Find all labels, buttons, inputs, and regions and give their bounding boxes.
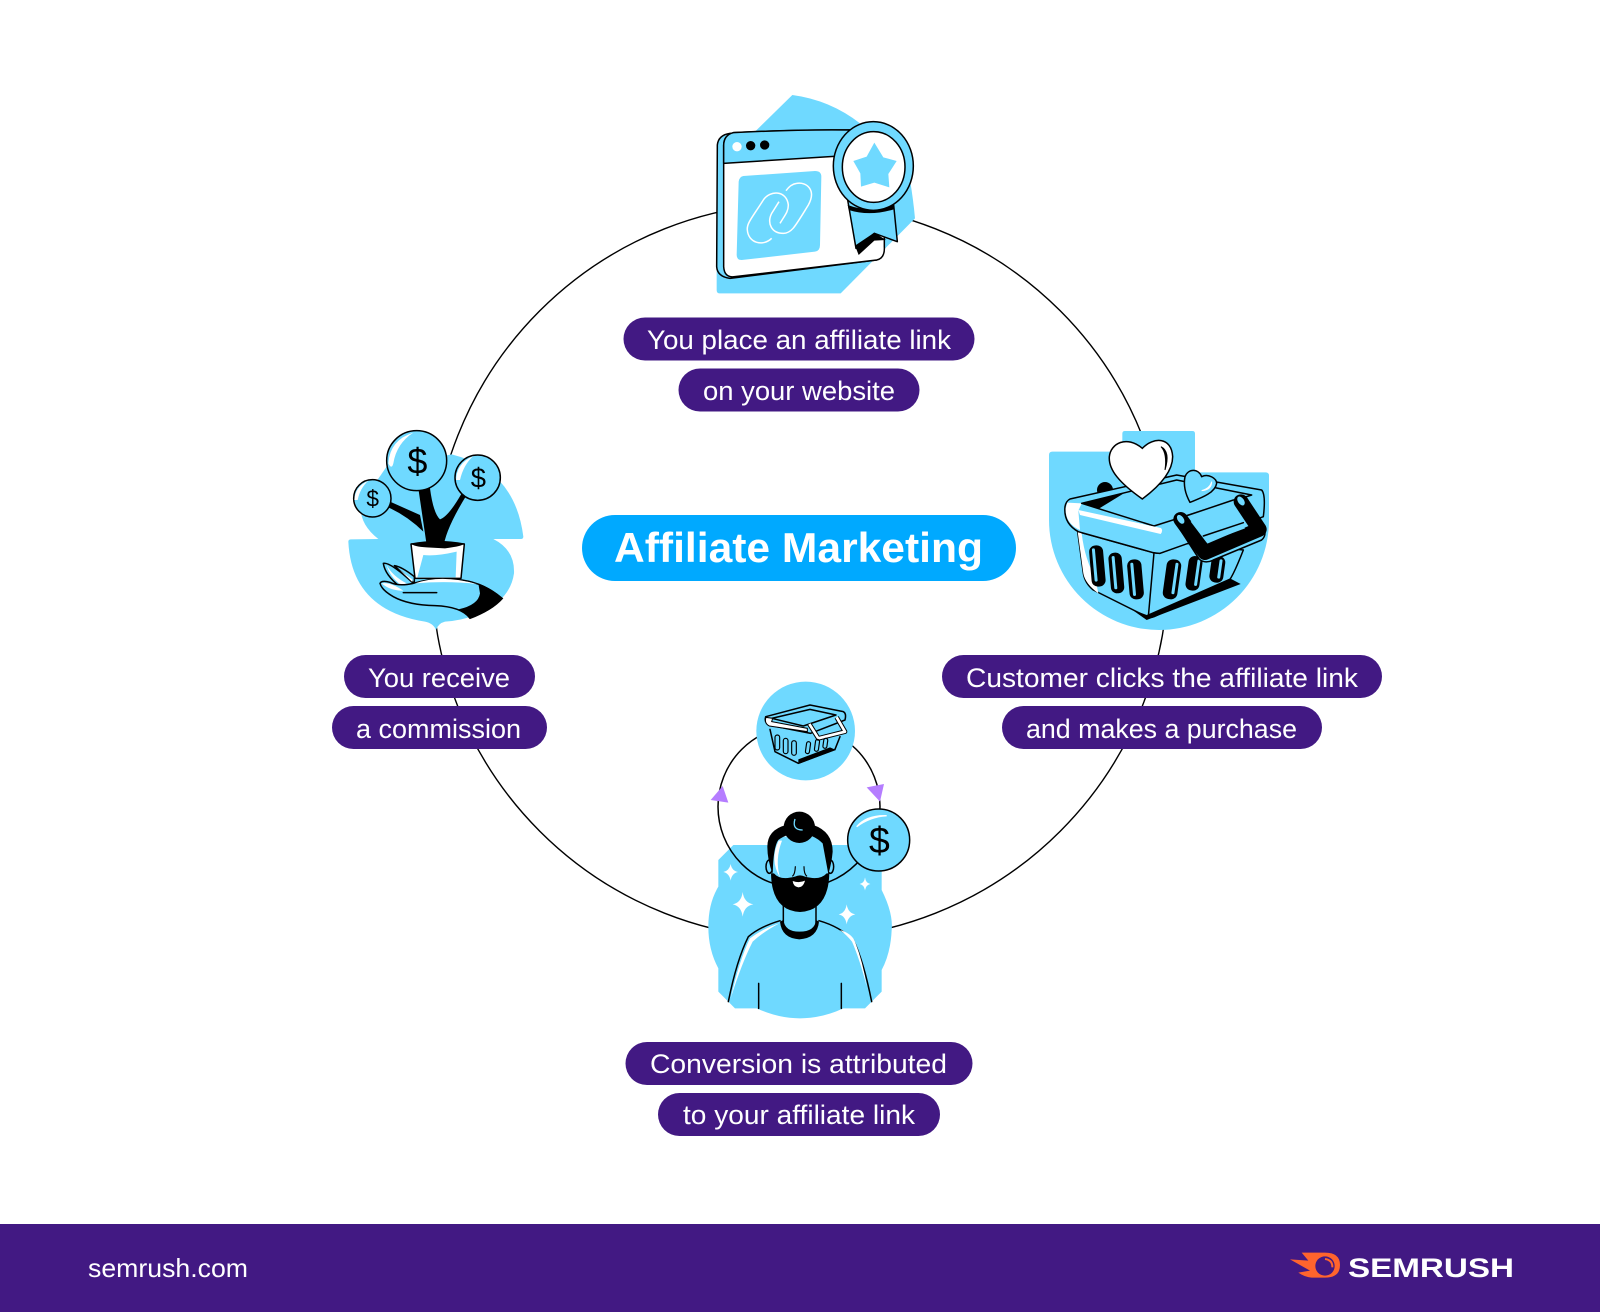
title pill: Affiliate Marketing: [614, 524, 983, 571]
step 4 label: a commission: [356, 714, 521, 744]
icon: small basket: [765, 705, 846, 764]
logo: semrush: [1290, 1253, 1514, 1283]
step 3 label: to your affiliate link: [683, 1100, 916, 1130]
icon: person: [728, 812, 872, 1008]
step 4 label: [332, 655, 547, 749]
step 1 label: You place an affiliate link: [647, 325, 952, 355]
icon: website with affiliate link and badge: [717, 95, 915, 293]
logo: semrush: SEMRUSH: [1348, 1253, 1514, 1283]
step 2 label: [942, 655, 1382, 749]
icon: coin: $: [869, 819, 890, 861]
icon: shopping basket with hearts: [1049, 431, 1269, 630]
step 2 label: and makes a purchase: [1026, 714, 1297, 744]
step 4 label: You receive: [368, 663, 510, 693]
icon: money plant in hand: [348, 431, 523, 630]
icon: left coin: $: [366, 486, 379, 512]
step 2 label: Customer clicks the affiliate link: [966, 663, 1359, 693]
step 1 label: [624, 318, 974, 412]
title pill: [582, 515, 1016, 581]
footer bar: [0, 1224, 1600, 1312]
icon: large coin: $: [407, 440, 427, 481]
icon: coin: [848, 809, 910, 871]
step 1 label: on your website: [703, 376, 895, 406]
step 3 label: [626, 1042, 972, 1136]
footer url: semrush.com: [88, 1253, 248, 1283]
icon: large coin: [387, 431, 447, 491]
icon: left coin: [354, 480, 391, 517]
step 3 label: Conversion is attributed: [650, 1049, 947, 1079]
icon: right coin: $: [471, 463, 486, 494]
icon: man with cycle of basket and coin: [708, 682, 910, 1018]
icon: right coin: [455, 455, 500, 500]
